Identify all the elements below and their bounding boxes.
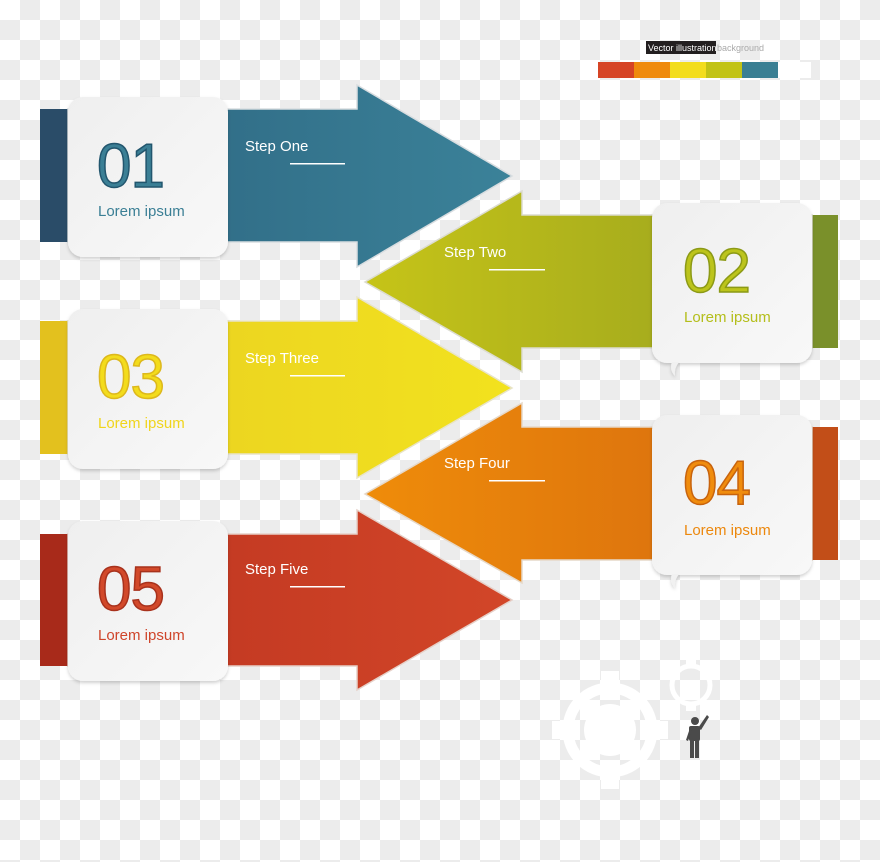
card 04: [652, 415, 812, 588]
arrow 2: step two: [365, 191, 838, 372]
card 03: [68, 309, 228, 469]
card 04: Lorem ipsum: [684, 522, 771, 539]
card 01: 01: [97, 132, 164, 201]
card 01: [68, 97, 228, 257]
card 05: [68, 521, 228, 681]
arrow 1: step one: [40, 85, 512, 267]
card 02: 02: [683, 237, 750, 306]
card 01: Lorem ipsum: [98, 203, 185, 220]
legend label: Vector illustration: [648, 43, 717, 53]
card 04: 04: [683, 449, 750, 518]
card 02: [652, 203, 812, 376]
arrow 3: step three: Step Three: [245, 350, 319, 367]
icon: small white gear outline: [672, 658, 710, 711]
card 05: Lorem ipsum: [98, 627, 185, 644]
card 03: 03: [97, 343, 164, 412]
arrow 4: step four: [365, 403, 838, 583]
card 02: Lorem ipsum: [684, 309, 771, 326]
icon: large white gear: [552, 671, 668, 789]
arrow 5: step five: Step Five: [245, 561, 308, 578]
legend label: background: [717, 43, 764, 53]
icon: person figure: [686, 715, 709, 758]
arrow 1: step one: Step One: [245, 138, 308, 155]
arrow 3: step three: [40, 297, 512, 478]
card 03: Lorem ipsum: [98, 415, 185, 432]
legend label: [646, 41, 764, 54]
arrow 2: step two: Step Two: [444, 244, 506, 261]
legend: colour swatches: [598, 41, 811, 78]
arrow 4: step four: Step Four: [444, 455, 510, 472]
card 05: 05: [97, 555, 164, 624]
arrow 5: step five: [40, 510, 512, 690]
